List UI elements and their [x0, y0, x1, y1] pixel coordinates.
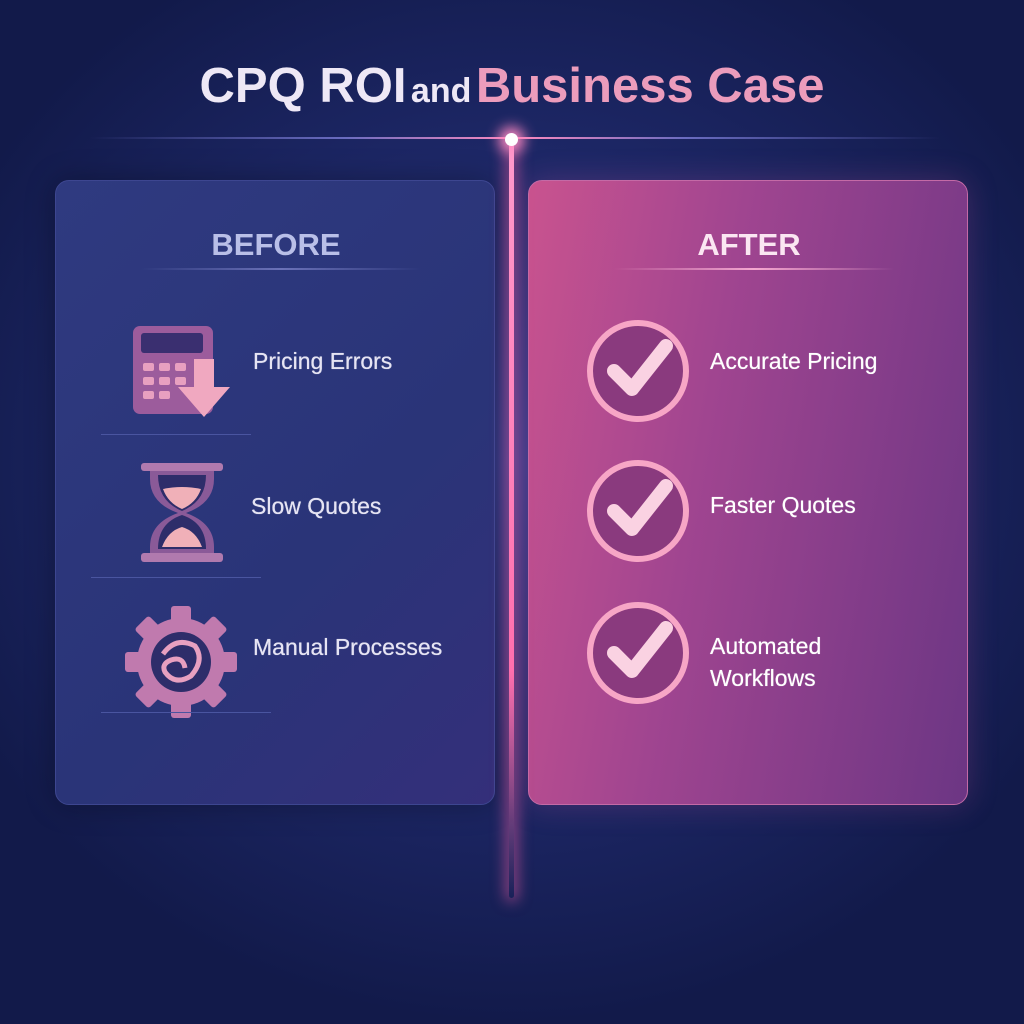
text: automated workflows [710, 633, 821, 691]
text: slow quotes: Slow Quotes [251, 493, 381, 519]
text: accurate pricing: Accurate Pricing [710, 348, 877, 374]
horizontal divider line [90, 137, 940, 139]
heading: after: AFTER [697, 227, 801, 262]
text: automated workflows: Automated [710, 633, 821, 659]
title: CPQ ROI and Business Case [200, 59, 824, 113]
vertical glowing divider [509, 138, 514, 898]
icon: gear [125, 606, 237, 718]
right panel: after [528, 180, 968, 805]
left panel: before [55, 180, 495, 805]
text: faster quotes: Faster Quotes [710, 492, 856, 518]
glow dot [505, 133, 518, 146]
text: pricing errors: Pricing Errors [253, 348, 392, 374]
text: manual processes: Manual Processes [253, 634, 442, 660]
check icon 3 [587, 602, 689, 704]
check icon 1 [587, 320, 689, 422]
check icon 2 [587, 460, 689, 562]
text: automated workflows: Workflows [710, 665, 816, 691]
icon: calculator [133, 326, 230, 417]
heading: before: BEFORE [211, 227, 341, 262]
icon: hourglass [141, 463, 223, 562]
underline [141, 268, 421, 270]
